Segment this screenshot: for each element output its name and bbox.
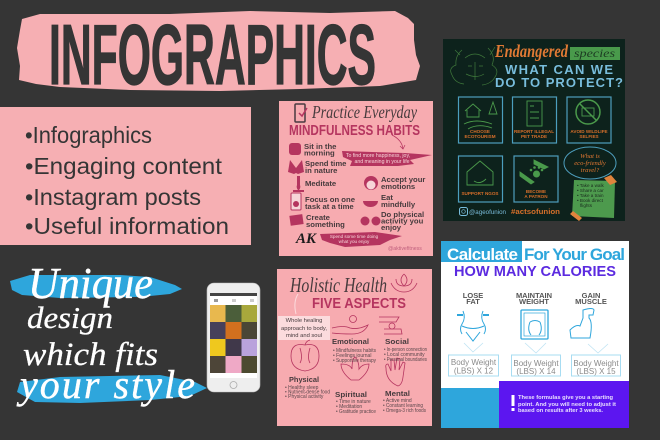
slogan with blue brush strokes (10, 259, 207, 407)
slogan with blue brush strokes: Unique (28, 259, 153, 308)
formula boxes: (LBS) X 12 (454, 366, 494, 376)
note: travel tips: • Book direct (577, 198, 604, 203)
note: travel tips: flights (580, 203, 593, 208)
callout: find more happiness: and meaning in your life (354, 159, 410, 165)
icon: checklist phone (295, 104, 307, 122)
icon: paw (530, 166, 543, 178)
endangered heading: species (574, 46, 615, 60)
callout: spend some time: Spend some time doing (330, 234, 379, 239)
panel: feature list: •Infographics (25, 122, 152, 148)
action labels: AVOID WILDLIFE (570, 129, 608, 134)
action labels (461, 129, 608, 199)
logo AK: AK (295, 231, 317, 247)
panel: feature list (0, 107, 251, 245)
endangered heading: DO TO PROTECT? (495, 75, 623, 90)
aspect bullet lists: • Feelings journal (333, 353, 371, 359)
formula boxes: (LBS) X 15 (576, 367, 616, 376)
callout: eco-friendly travel (564, 147, 616, 179)
handle: @aktivefitness (388, 246, 422, 252)
habit labels: Create (306, 213, 331, 222)
mindfulness heading: MINDFULNESS HABITS (289, 122, 420, 139)
formula boxes (448, 355, 620, 376)
holistic heading: FIVE ASPECTS (312, 296, 406, 312)
habit labels: enjoy (381, 223, 402, 232)
endangered heading: WHAT CAN WE (505, 62, 613, 77)
aspect bullet lists: • Meditation (336, 404, 362, 410)
habit labels: Eat (381, 193, 393, 202)
aspect headings: Social (385, 337, 409, 346)
action labels: BECOME (526, 189, 546, 194)
callout: whole healing: mind and soul (286, 333, 322, 339)
holistic heading: Holistic Health (289, 273, 387, 297)
footer blocks and note: These formulas give you a starting (518, 395, 613, 401)
habit labels: mindfully (381, 200, 416, 209)
goal labels: MAINTAIN (516, 291, 552, 300)
habit labels: Meditate (305, 179, 337, 188)
callout: spend some time: what you enjoy (339, 239, 370, 244)
note: travel tips: • Share a car (577, 188, 604, 193)
icon: phone mockup (207, 283, 260, 392)
habit labels: Do physical (381, 210, 424, 219)
action labels: ECOTOURISM (464, 134, 496, 139)
calorie heading (441, 241, 625, 280)
endangered heading: Endangered (494, 41, 569, 61)
habit labels: emotions (381, 182, 415, 191)
formula boxes: Body Weight (451, 358, 497, 367)
aspect bullet lists: • Constant learning (383, 403, 423, 409)
aspect bullet lists: • Time in nature (336, 399, 371, 405)
action icons (464, 100, 600, 185)
callout: eco-friendly travel: What is (580, 153, 600, 160)
holistic heading (289, 273, 406, 312)
callout: eco-friendly travel: travel? (581, 167, 600, 174)
callout: whole healing: approach to body, (281, 326, 327, 332)
habit labels: task at a time (305, 202, 354, 211)
aspect headings: Emotional (332, 337, 369, 346)
callout: spend some time (320, 232, 402, 247)
action labels: PET TRADE (521, 134, 547, 139)
habit labels: morning (304, 148, 335, 158)
goal labels: LOSE (463, 291, 483, 300)
note: travel tips: • Take a walk (577, 183, 605, 188)
aspect bullet lists: • Gratitude practice (336, 409, 376, 415)
aspect bullet lists: • Active mind (383, 398, 412, 404)
aspect bullet lists: • Omega-3 rich foods (383, 408, 426, 414)
aspect bullet lists: • In-person connection (384, 347, 427, 353)
goal labels: WEIGHT (519, 297, 549, 306)
aspect bullet lists: • Personal boundaries (384, 357, 427, 363)
panel: endangered species (443, 39, 625, 221)
habit labels: Sit in the (304, 142, 337, 151)
mindfulness heading: Practice Everyday (311, 102, 417, 122)
panel: feature list: •Instagram posts (25, 184, 201, 210)
aspect bullet lists: • Healthy sleep (285, 385, 319, 391)
goal labels: GAIN (582, 291, 600, 300)
habit labels: something (306, 220, 345, 229)
action labels: SELFIES (579, 134, 599, 139)
social footer: #actsofunion (511, 209, 560, 216)
social footer (460, 208, 560, 216)
title banner (17, 8, 420, 103)
panel: mindfulness habits (279, 101, 433, 256)
aspect bullet lists: • Supportive therapy (333, 358, 376, 364)
slogan with blue brush strokes: design (27, 300, 113, 335)
callout: eco-friendly travel: eco-friendly (574, 160, 606, 167)
goal labels: FAT (466, 297, 480, 306)
action labels: SUPPORT NGOS (461, 191, 499, 196)
action labels: CHOOSE (470, 129, 490, 134)
footer blocks and note (441, 381, 629, 428)
action labels: REPORT ILLEGAL (514, 129, 554, 134)
slogan with blue brush strokes: which fits (23, 337, 158, 373)
footer blocks and note: point. And you will need to adjust it (518, 402, 616, 408)
callout: find more happiness: To find more happiness, joy, (346, 153, 410, 159)
goal labels (463, 291, 607, 306)
calorie heading: Calculate (447, 245, 518, 264)
endangered heading (494, 41, 623, 90)
aspect bullet lists: • Local community (384, 352, 425, 358)
habit labels: Spend time (305, 159, 347, 168)
formula boxes: Body Weight (573, 359, 619, 368)
goal icons (457, 308, 594, 341)
habit labels: activity you (381, 216, 424, 226)
panel: calorie calculator (441, 241, 629, 428)
aspect icons (291, 316, 405, 386)
icon: foliage face (451, 47, 497, 85)
habit labels: Focus on one (305, 195, 356, 204)
aspect headings: Physical (289, 375, 319, 384)
aspect bullet lists (285, 347, 427, 415)
panel: feature list: •Useful information (25, 213, 229, 239)
callout: whole healing (278, 294, 330, 340)
footer blocks and note: based on results after 3 weeks. (518, 408, 604, 414)
note: travel tips (570, 175, 617, 221)
action labels: A PATRON (524, 194, 548, 199)
aspect bullet lists: • Mindfulness habits (333, 348, 376, 354)
aspect headings: Spiritual (335, 390, 367, 399)
mindfulness heading (289, 102, 420, 139)
goal labels: MUSCLE (575, 297, 607, 306)
habit labels: in nature (305, 166, 338, 175)
calorie heading: For Your Goal (524, 245, 625, 264)
aspect headings (289, 337, 410, 399)
calorie heading: HOW MANY CALORIES (454, 263, 616, 280)
formula boxes: (LBS) X 14 (516, 367, 556, 376)
note: travel tips: • Take a train (577, 193, 604, 198)
habit labels (304, 142, 425, 232)
habit icons (288, 143, 380, 226)
panel: feature list: •Engaging content (25, 153, 223, 179)
callout: whole healing: Whole healing (286, 318, 322, 324)
panel: holistic health (277, 269, 432, 426)
action boxes (458, 97, 611, 202)
habit labels: Accept your (381, 175, 425, 184)
aspect bullet lists: • Nutrient-dense food (285, 390, 330, 396)
icon: lotus hands (391, 274, 417, 292)
social footer: @ageofunion (469, 210, 506, 216)
chevrons (464, 343, 608, 353)
formula boxes: Body Weight (513, 359, 559, 368)
aspect bullet lists: • Physical activity (285, 394, 324, 400)
aspect headings: Mental (385, 389, 410, 398)
slogan with blue brush strokes: your style (16, 362, 195, 407)
callout: find more happiness (342, 135, 432, 166)
